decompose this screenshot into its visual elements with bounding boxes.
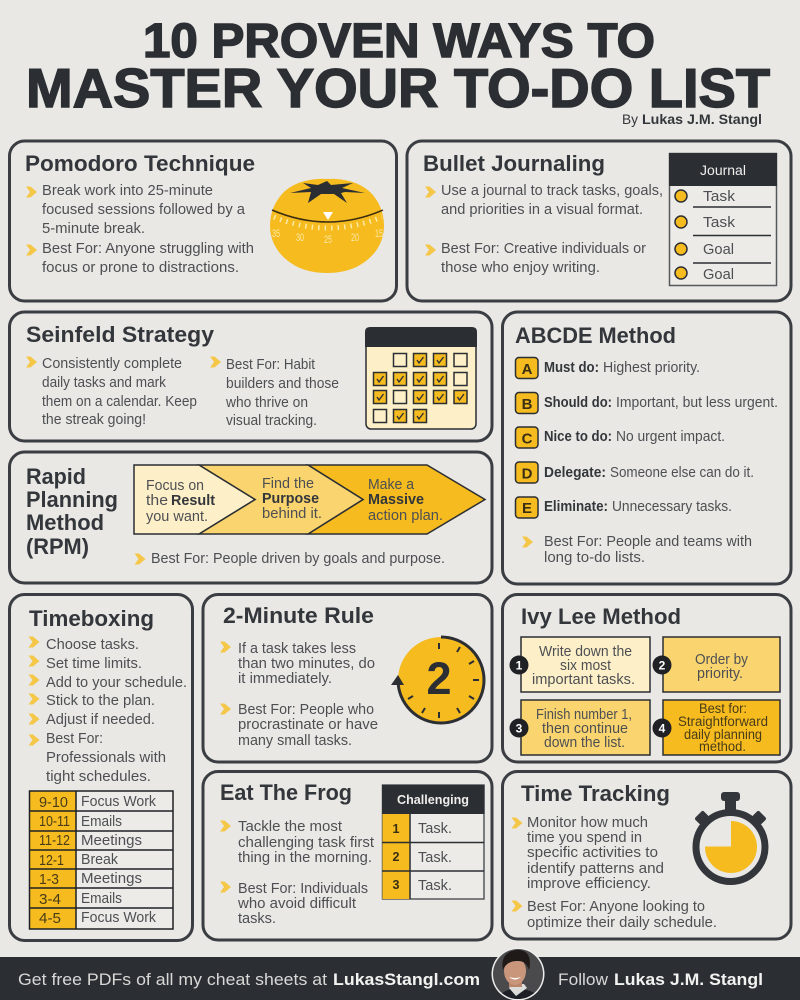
step 2: [652, 637, 780, 692]
step: result: Focus on: [146, 477, 204, 494]
icon: tomato timer: 30: [296, 232, 304, 244]
icon: journal list: Goal: [703, 267, 734, 283]
icon: tomato timer: 15: [375, 228, 383, 240]
item: E eliminate: E: [522, 500, 532, 517]
text: best for: Best For: Habit: [226, 356, 316, 373]
step: purpose: Find the: [262, 475, 314, 492]
heading: Time Tracking: Time Tracking: [521, 781, 670, 806]
text: description: Break work into 25-minute: [42, 182, 213, 199]
heading: Timeboxing: Timeboxing: [29, 606, 154, 631]
byline: By: [622, 111, 638, 127]
heading: Rapid Planning Method (RPM): Rapid: [26, 464, 86, 489]
step 3: [510, 700, 650, 755]
step 1: Write down the: [539, 643, 632, 660]
text: description: [220, 818, 375, 866]
text: best for: [522, 533, 752, 566]
heading: Bullet Journaling: Bullet Journaling: [423, 151, 605, 176]
icon: journal list: Task: [703, 189, 736, 205]
step 3: Finish number 1,: [536, 706, 632, 723]
step 1: [510, 637, 650, 692]
step: massive: Massive: [368, 492, 424, 508]
text: best for: [220, 880, 368, 927]
step 2: 2: [659, 658, 666, 672]
text: description: [26, 355, 197, 428]
item: D delegate: D: [522, 466, 533, 482]
text: best for: procrastinate or have: [238, 716, 378, 733]
table: schedule: Emails: [81, 814, 122, 830]
icon: journal list: Goal: [703, 242, 734, 258]
table: challenging tasks: [382, 785, 484, 899]
icon: journal list: Task: [703, 215, 736, 231]
table: challenging tasks: 2: [393, 850, 400, 864]
item: B should do: [516, 392, 778, 414]
panel: Seinfeld Strategy: [10, 312, 492, 441]
step: purpose: Purpose: [262, 491, 319, 507]
table: challenging tasks: 3: [393, 878, 400, 892]
step 4: 4: [659, 722, 666, 736]
text: steps: Stick to the plan.: [46, 692, 155, 709]
step: result: the: [146, 492, 168, 509]
heading: Eat The Frog: Eat The Frog: [220, 780, 352, 805]
text: best for: tasks.: [238, 910, 276, 927]
text: description: Consistently complete: [42, 355, 182, 372]
panel: Time Tracking: [502, 772, 791, 939]
step 1: important tasks.: [532, 671, 635, 688]
item: D delegate: Delegate:: [544, 465, 606, 481]
footer text: free PDFs: [18, 970, 480, 989]
text: best for: Best For: Anyone struggling with: [42, 240, 254, 257]
icon: tomato timer: 35: [272, 228, 280, 240]
footer text: free PDFs: LukasStangl.com: [333, 970, 480, 989]
item: E eliminate: Unnecessary tasks.: [612, 498, 732, 515]
text: steps: Adjust if needed.: [46, 711, 155, 728]
panel: Pomodoro Technique: [10, 141, 396, 301]
footer text: follow: Lukas J.M. Stangl: [614, 970, 763, 989]
item: D delegate: [516, 462, 754, 483]
footer text: follow: Follow: [558, 970, 609, 989]
icon: habit calendar: [365, 327, 477, 429]
text: best for: [425, 240, 646, 276]
step 4: daily planning: [684, 727, 762, 742]
text: best for: Best For: Creative individuals or: [441, 240, 646, 257]
icon: tomato timer: 20: [351, 232, 359, 244]
text: description: focused sessions followed by a: [42, 201, 246, 218]
chart: three-step arrow: [134, 465, 485, 534]
item: C nice to do: No urgent impact.: [616, 428, 725, 445]
text: description: them on a calendar. Keep: [42, 393, 197, 410]
heading: Rapid Planning Method (RPM): (RPM): [26, 534, 89, 559]
heading: Rapid Planning Method (RPM): Planning: [26, 487, 118, 512]
table: schedule: 3-4: [39, 892, 61, 908]
panel: Rapid Planning Method: [10, 452, 492, 583]
step: result: [146, 477, 215, 525]
icon: stopwatch: [694, 792, 767, 882]
table: schedule: Focus Work: [81, 910, 157, 926]
text: description: than two minutes, do: [238, 655, 375, 672]
panel: ABCDE Method: [502, 312, 791, 584]
text: best for: who avoid difficult: [237, 895, 357, 912]
step 4: [652, 700, 780, 755]
heading: Rapid Planning Method (RPM): [26, 464, 118, 559]
table: schedule: 12-1: [39, 853, 64, 869]
text: description: improve efficiency.: [527, 875, 651, 892]
text: best for: optimize their daily schedule.: [527, 914, 717, 931]
text: description: Tackle the most: [238, 818, 343, 835]
text: best for: Best For: People and teams with: [544, 533, 752, 550]
step: purpose: behind it.: [262, 505, 322, 522]
table: schedule: Focus Work: [81, 794, 157, 810]
step 1: 1: [516, 658, 523, 672]
text: best for: [210, 356, 339, 429]
item: B should do: B: [522, 396, 533, 413]
table: schedule: 4-5: [39, 911, 61, 927]
table: schedule: [30, 791, 173, 929]
panel: Eat The Frog: [203, 772, 492, 940]
icon: journal list: Journal: [700, 162, 746, 178]
table: schedule: Emails: [81, 891, 122, 907]
text: description: Monitor how much: [527, 814, 648, 831]
text: steps: tight schedules.: [46, 768, 151, 785]
text: description: the streak going!: [42, 411, 146, 428]
item: A must do: Must do:: [544, 360, 599, 376]
step 4: Best for:: [699, 701, 747, 716]
step 2: priority.: [697, 665, 743, 682]
table: challenging tasks: Task.: [418, 878, 452, 894]
text: steps: Professionals with: [46, 749, 166, 766]
text: description: challenging task first: [238, 834, 375, 851]
table: schedule: Meetings: [81, 833, 142, 849]
step 1: six most: [560, 657, 612, 674]
step 2: Order by: [695, 651, 748, 668]
table: schedule: Meetings: [81, 871, 142, 887]
text: description: [220, 640, 375, 687]
text: best for: who thrive on: [225, 394, 308, 411]
step: result: Result: [171, 493, 215, 509]
item: C nice to do: Nice to do:: [544, 429, 612, 445]
table: schedule: 9-10: [39, 795, 68, 811]
text: steps: [28, 636, 187, 785]
table: schedule: 11-12: [39, 833, 70, 849]
panel: Bullet Journaling: [407, 141, 791, 301]
text: description: time you spend in: [527, 829, 642, 846]
title: 10 PROVEN WAYS TO: [143, 15, 655, 68]
text: best for: focus or prone to distractions.: [42, 259, 239, 276]
title: [26, 15, 770, 119]
step: result: you want.: [146, 508, 208, 525]
item: E eliminate: [516, 497, 732, 518]
text: description: Use a journal to track tasks, goals,: [441, 182, 663, 199]
footer bar: [0, 946, 800, 1000]
text: steps: Set time limits.: [46, 655, 142, 672]
text: description: it immediately.: [238, 670, 332, 687]
text: best for: [512, 898, 717, 931]
heading: Rapid Planning Method (RPM): Method: [26, 510, 104, 535]
text: best for: Best For: People driven by goals and purpose.: [151, 550, 445, 567]
table: schedule: 1-3: [39, 872, 59, 888]
text: steps: Choose tasks.: [46, 636, 139, 653]
icon: tomato timer: [270, 179, 384, 273]
text: description: daily tasks and mark: [42, 374, 166, 391]
text: description: [26, 182, 246, 237]
item: D delegate: Someone else can do it.: [610, 464, 754, 481]
icon: journal list: [669, 153, 777, 286]
text: best for: Best For: Individuals: [238, 880, 368, 897]
icon: author portrait: [492, 949, 544, 1000]
text: best for: [26, 240, 254, 276]
text: best for: long to-do lists.: [544, 549, 645, 566]
table: challenging tasks: Task.: [418, 850, 452, 866]
step: massive: action plan.: [368, 507, 443, 524]
table: challenging tasks: Challenging: [397, 793, 469, 807]
item: C nice to do: C: [522, 430, 533, 448]
text: best for: Best For: Anyone looking to: [527, 898, 705, 915]
step 3: 3: [516, 722, 523, 736]
heading: ABCDE Method: ABCDE Method: [515, 323, 676, 348]
icon: two-minute clock: 2: [426, 653, 452, 704]
text: description: and priorities in a visual format.: [441, 201, 643, 218]
item: B should do: Important, but less urgent.: [616, 394, 778, 411]
item: A must do: A: [522, 361, 533, 378]
text: best for: Best For: People who: [238, 701, 374, 718]
step 3: down the list.: [544, 734, 625, 751]
item: A must do: Highest priority.: [603, 359, 700, 376]
item: C nice to do: [516, 427, 725, 448]
text: best for: visual tracking.: [226, 412, 317, 429]
step 4: method.: [699, 739, 746, 754]
table: schedule: Break: [81, 852, 119, 868]
title: MASTER YOUR TO-DO LIST: [26, 57, 770, 119]
text: best for: those who enjoy writing.: [441, 259, 600, 276]
text: steps: Best For:: [46, 730, 103, 747]
item: E eliminate: Eliminate:: [544, 499, 608, 515]
item: A must do: [516, 358, 700, 378]
text: best for: many small tasks.: [238, 732, 352, 749]
table: challenging tasks: 1: [393, 822, 400, 836]
heading: Pomodoro Technique: Pomodoro Technique: [25, 151, 255, 176]
step 4: Straightforward: [678, 714, 768, 729]
footer text: free PDFs: Get free PDFs of all my cheat sheets at: [18, 970, 327, 989]
table: schedule: 10-11: [39, 814, 70, 830]
panel: Timeboxing: [10, 594, 192, 940]
icon: two-minute clock: [391, 637, 484, 723]
heading: Ivy Lee Method: Ivy Lee Method: [521, 604, 681, 629]
icon: tomato timer: 25: [324, 234, 332, 246]
step: massive: [368, 476, 443, 524]
text: steps: Add to your schedule.: [46, 674, 187, 691]
text: description: thing in the morning.: [238, 849, 372, 866]
text: best for: builders and those: [226, 375, 339, 392]
step 3: then continue: [542, 720, 628, 737]
panel: 2-Minute Rule: [203, 594, 492, 762]
text: description: specific activities to: [527, 844, 658, 861]
heading: Seinfeld Strategy: Seinfeld Strategy: [26, 322, 215, 347]
text: description: [425, 182, 663, 218]
step: massive: Make a: [368, 476, 415, 493]
item: B should do: Should do:: [544, 395, 612, 411]
panel: Ivy Lee Method: [502, 594, 791, 762]
text: best for: [220, 701, 378, 749]
byline: Lukas J.M. Stangl: [642, 111, 762, 127]
table: challenging tasks: Task.: [418, 821, 452, 837]
text: description: 5-minute break.: [42, 220, 145, 237]
text: description: identify patterns and: [527, 860, 664, 877]
text: description: [512, 814, 664, 892]
text: description: If a task takes less: [238, 640, 356, 657]
step: purpose: [262, 475, 322, 522]
heading: 2-Minute Rule: 2-Minute Rule: [223, 603, 374, 628]
